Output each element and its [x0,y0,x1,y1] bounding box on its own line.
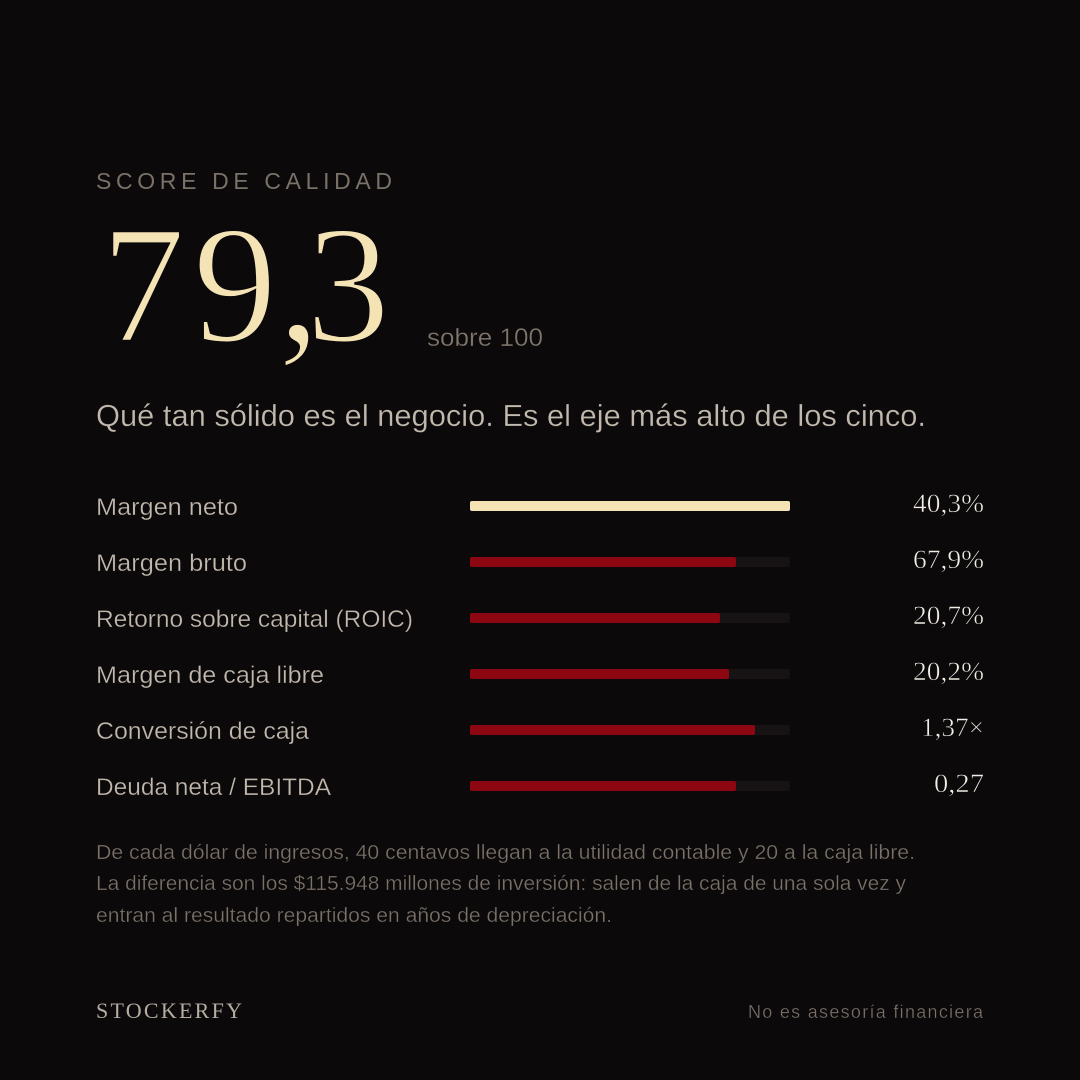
explanatory note: La diferencia son los $115.948 millones de inversión: salen de la caja de una sola vez y [96,873,906,895]
metric: deuda neta / EBITDA: 0,27 [934,769,984,798]
metric: margen neto [96,489,984,521]
metric: conversión de caja: Conversión de caja [96,718,310,745]
big score number: 79,3 [101,192,390,378]
metric: margen bruto: Margen bruto [96,550,247,577]
metric: ROIC [96,601,984,633]
metric: margen bruto: 67,9% [913,545,984,574]
metric: margen neto: Margen neto [96,494,238,521]
metric: conversión de caja: 1,37× [921,713,984,742]
metric: margen neto: 40,3% [913,489,984,518]
metrics list [96,489,984,801]
metric: deuda neta / EBITDA: Deuda neta / EBITDA [96,774,331,801]
explanatory note [96,842,915,927]
metric: ROIC: Retorno sobre capital (ROIC) [96,606,413,633]
disclaimer: No es asesoría financiera [748,1002,984,1022]
metric: conversión de caja [96,713,984,745]
metric: margen de caja libre: 20,2% [913,657,984,686]
score scale: sobre 100 [427,324,543,352]
brand name: STOCKERFY [96,998,242,1023]
metric: margen de caja libre [96,657,984,689]
explanatory note: De cada dólar de ingresos, 40 centavos llegan a la utilidad contable y 20 a la caja libre. [96,842,915,864]
metric: margen de caja libre: Margen de caja libre [96,662,324,689]
metric: ROIC: 20,7% [913,601,984,630]
explanatory note: entran al resultado repartidos en años de depreciación. [96,905,612,927]
subtitle: Qué tan sólido es el negocio. Es el eje más alto de los cinco. [96,398,926,433]
metric: margen bruto [96,545,984,577]
metric: deuda neta / EBITDA [96,769,984,801]
eyebrow heading: SCORE DE CALIDAD [96,168,392,194]
